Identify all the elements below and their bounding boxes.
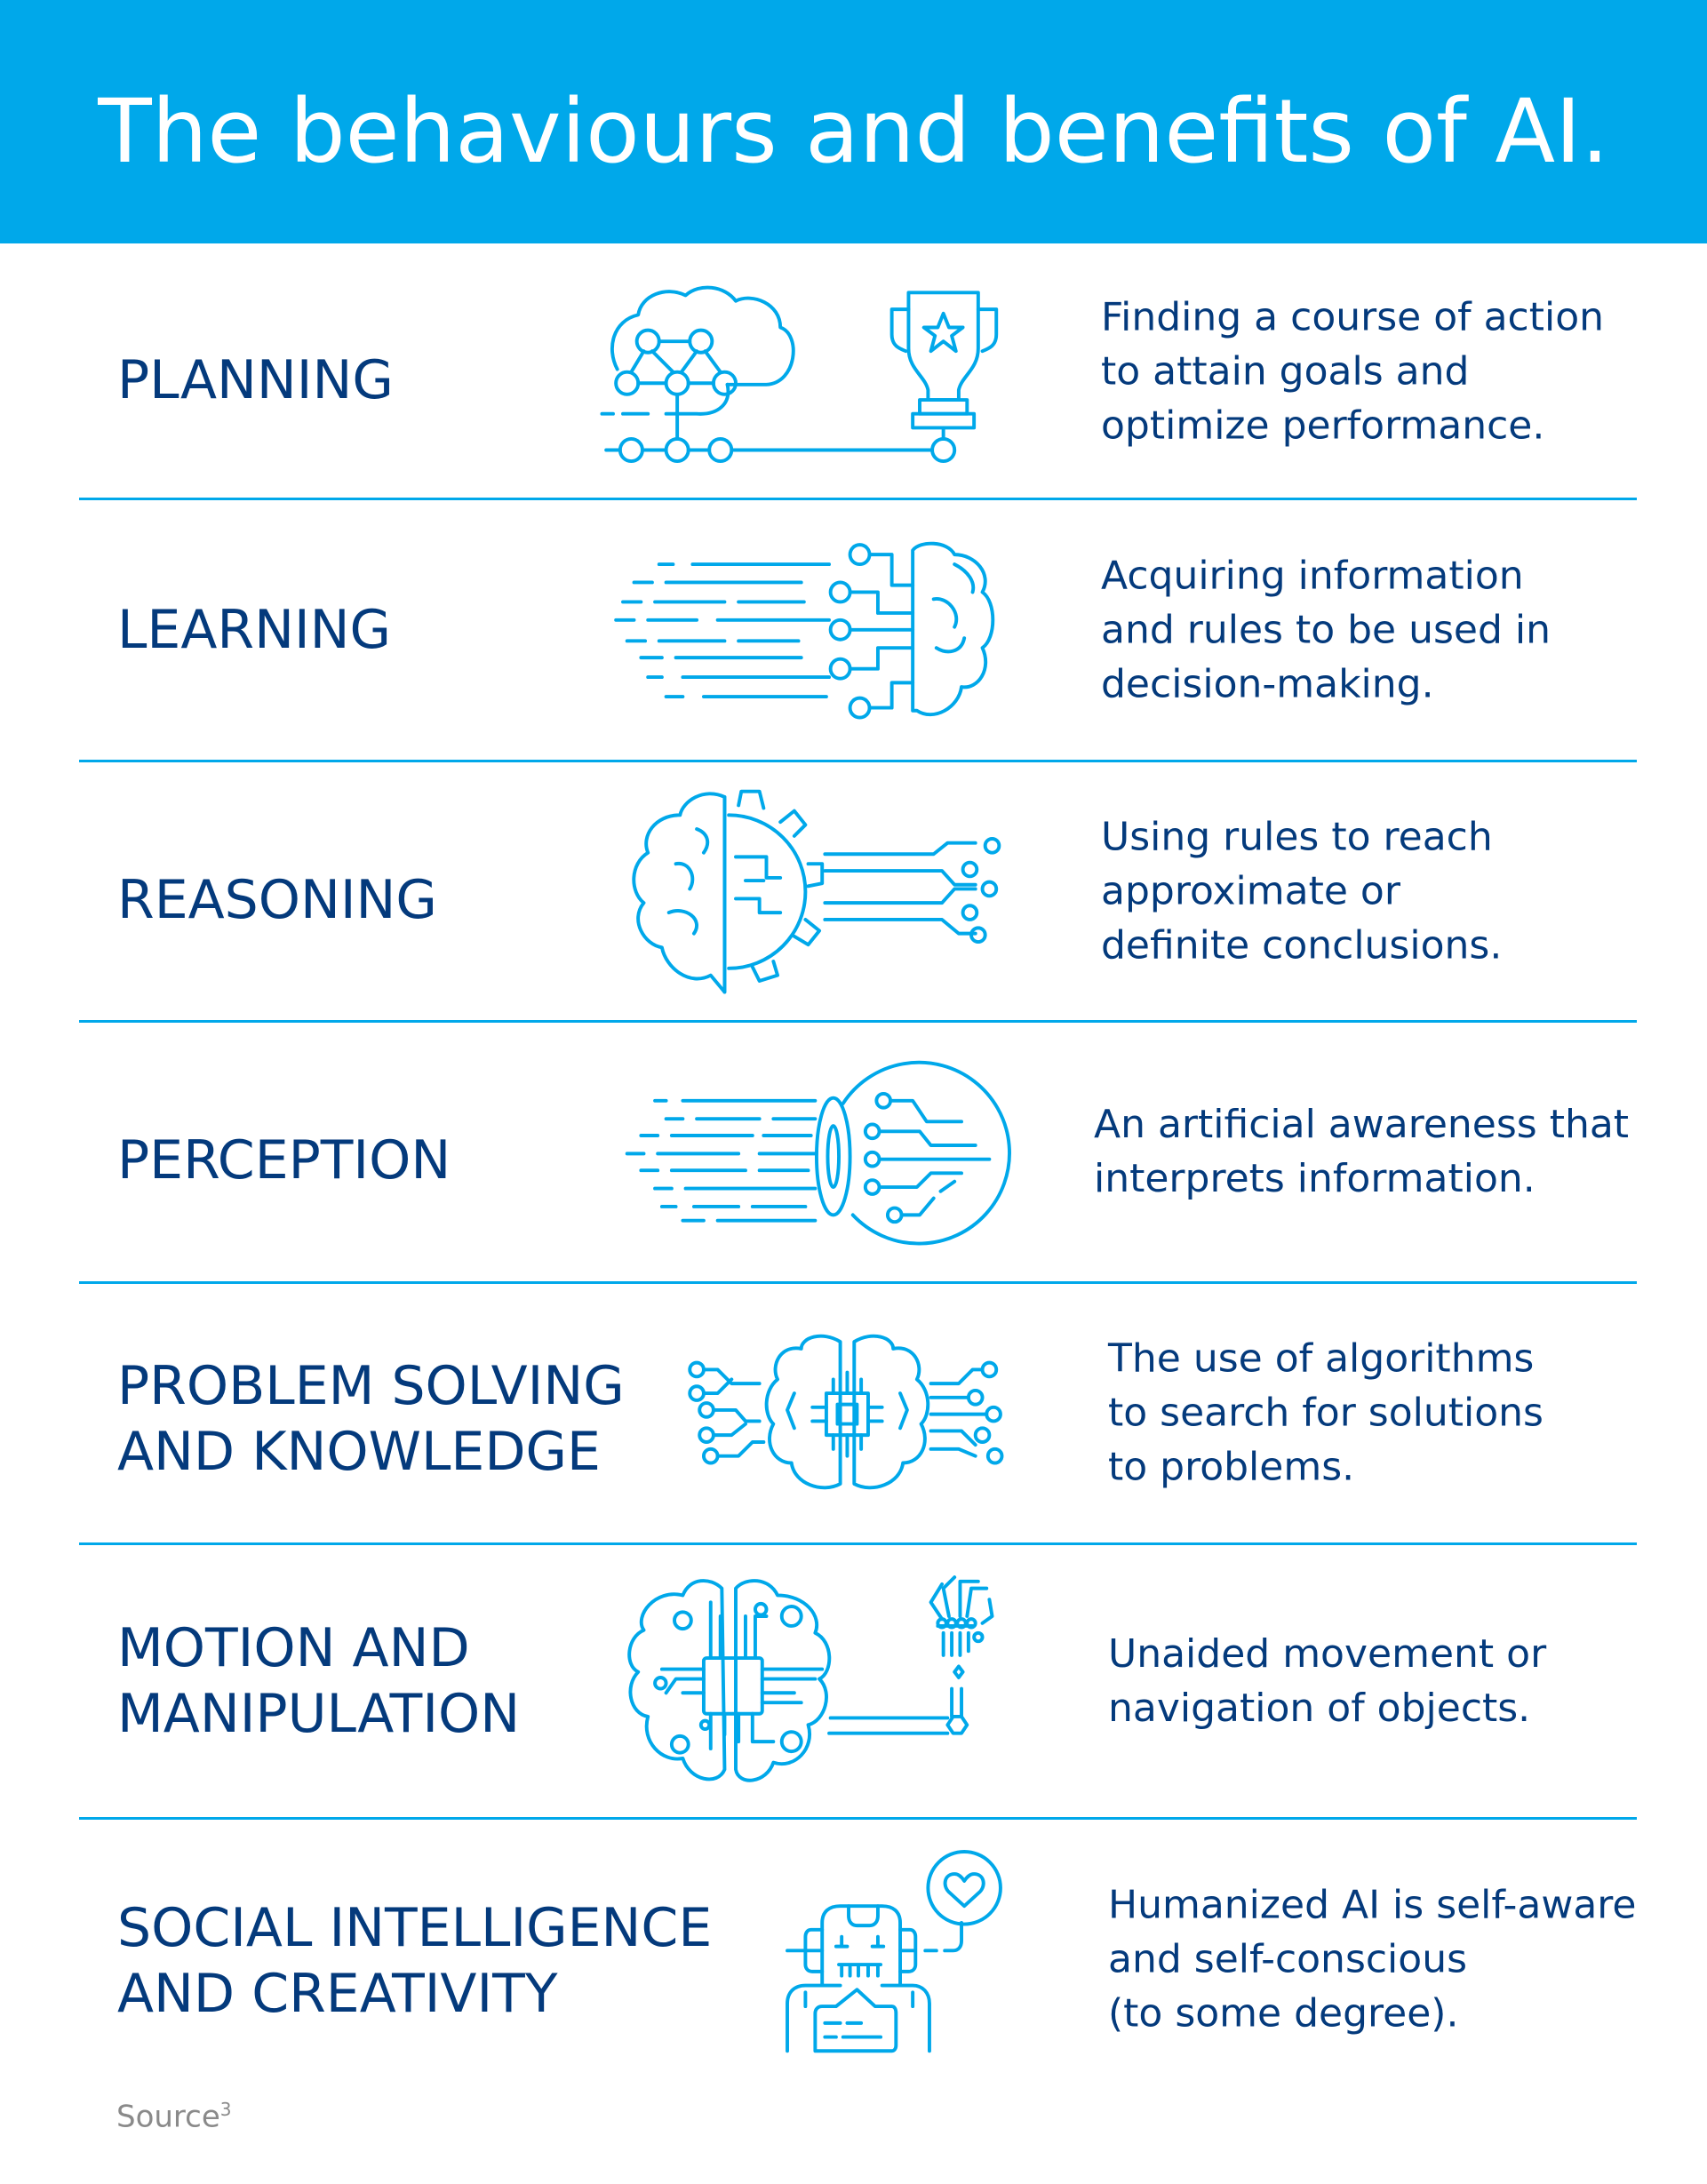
row: reasoning xyxy=(117,814,1502,968)
description: planning: Finding a course of action xyxy=(1101,294,1604,339)
row: planning xyxy=(117,294,1604,448)
label: planning: PLANNING xyxy=(117,348,394,410)
label: perception: PERCEPTION xyxy=(117,1129,451,1192)
source note: Source3 xyxy=(116,2099,232,2134)
icon: motion and manipulation xyxy=(629,1577,993,1781)
label: social: AND CREATIVITY xyxy=(117,1963,557,2025)
label: reasoning: REASONING xyxy=(117,869,437,931)
description: motion: navigation of objects. xyxy=(1108,1685,1530,1731)
title: The behaviours and benefits of AI. xyxy=(98,81,1609,183)
label: social: SOCIAL INTELLIGENCE xyxy=(117,1897,712,1959)
description: problem solving: to problems. xyxy=(1108,1445,1354,1489)
description: problem solving xyxy=(1107,1336,1543,1489)
icon: social intelligence xyxy=(787,1852,1001,2051)
description: problem solving: The use of algorithms xyxy=(1108,1336,1534,1381)
description: planning xyxy=(1101,294,1604,448)
description: perception: interprets information. xyxy=(1094,1156,1536,1201)
icon: planning xyxy=(602,288,996,461)
description: reasoning: approximate or xyxy=(1101,868,1400,913)
description: motion xyxy=(1108,1631,1546,1731)
description: learning xyxy=(1101,553,1551,706)
row: problem solving xyxy=(117,1336,1543,1489)
header banner xyxy=(0,0,1707,243)
description: learning: and rules to be used in xyxy=(1101,607,1551,652)
icon: reasoning xyxy=(634,792,999,992)
description: problem solving: to search for solutions xyxy=(1108,1390,1543,1436)
icon: learning xyxy=(616,544,993,718)
row: learning xyxy=(117,553,1551,706)
description: perception xyxy=(1094,1102,1629,1201)
label: motion xyxy=(117,1617,520,1745)
row: social xyxy=(117,1882,1636,2037)
description: social: and self-conscious xyxy=(1108,1937,1467,1981)
description: social xyxy=(1108,1882,1636,2037)
label: problem solving xyxy=(117,1355,625,1483)
icon: problem solving xyxy=(690,1336,1002,1487)
description: perception: An artificial awareness that xyxy=(1094,1102,1629,1147)
label: motion: MOTION AND xyxy=(117,1617,470,1679)
row: perception xyxy=(117,1102,1629,1201)
description: social: (to some degree). xyxy=(1108,1990,1458,2037)
description: social: Humanized AI is self-aware xyxy=(1108,1882,1636,1928)
label: problem solving: AND KNOWLEDGE xyxy=(117,1421,601,1483)
label: social xyxy=(117,1897,712,2025)
description: learning: Acquiring information xyxy=(1101,553,1524,598)
label: learning: LEARNING xyxy=(117,599,391,661)
icon: perception xyxy=(627,1063,1009,1244)
description: reasoning: definite conclusions. xyxy=(1101,922,1502,968)
description: planning: to attain goals and xyxy=(1101,348,1469,394)
description: motion: Unaided movement or xyxy=(1108,1631,1546,1676)
description: reasoning: Using rules to reach xyxy=(1101,814,1493,859)
description: learning: decision-making. xyxy=(1101,661,1434,706)
description: reasoning xyxy=(1101,814,1502,968)
row: motion xyxy=(117,1617,1546,1745)
label: problem solving: PROBLEM SOLVING xyxy=(117,1355,625,1417)
description: planning: optimize performance. xyxy=(1101,403,1544,448)
label: motion: MANIPULATION xyxy=(117,1683,520,1745)
